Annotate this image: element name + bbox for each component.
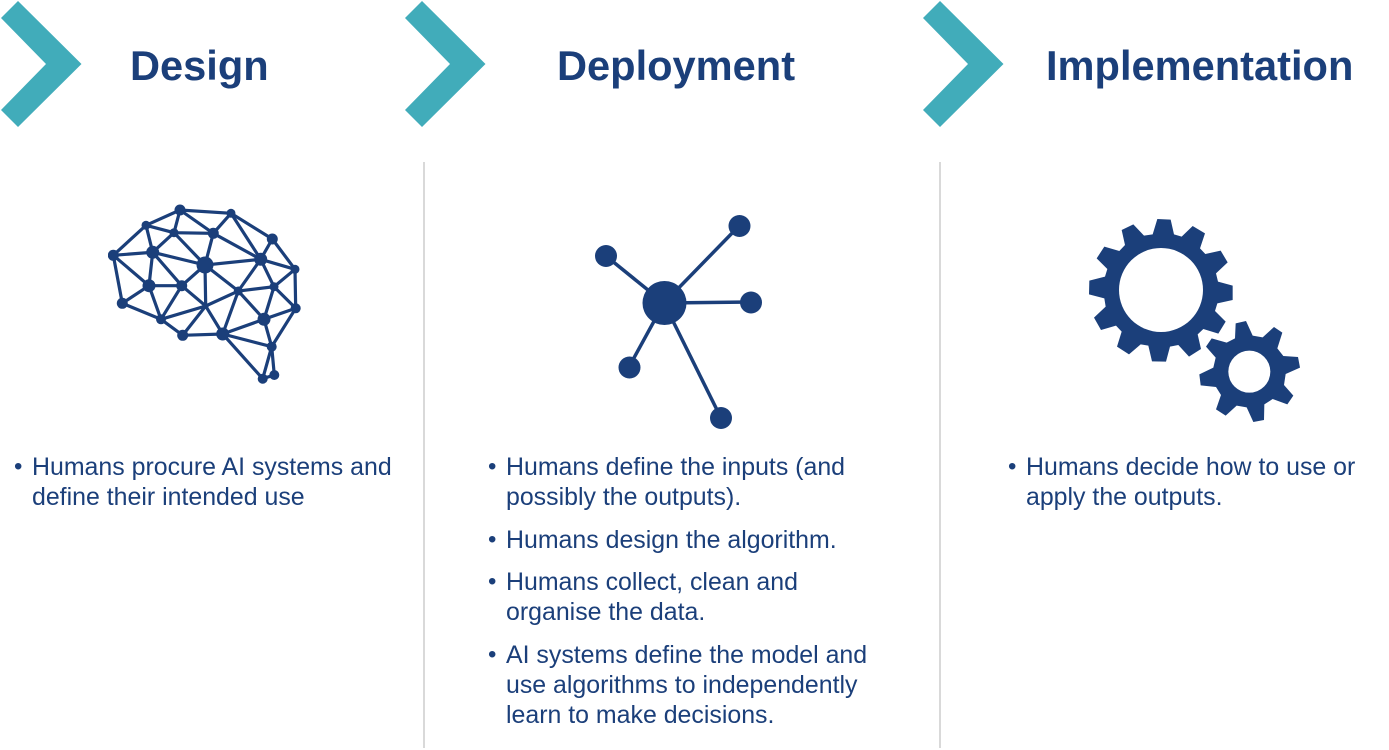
icon: neural brain (108, 204, 301, 384)
text block: implementation bullets (1008, 453, 1355, 511)
icon: chevron design (1, 1, 82, 127)
text block: deployment bullets: • (488, 641, 496, 668)
text block: implementation bullets: apply the outputs. (1026, 483, 1222, 511)
text block: deployment bullets: • (488, 568, 496, 595)
text block: design bullets: Humans procure AI systems and (32, 453, 392, 481)
icon: network hub (595, 215, 762, 429)
text block: design bullets: define their intended use (32, 483, 305, 511)
text block: deployment bullets: use algorithms to independently (506, 671, 857, 699)
text block: deployment bullets: Humans define the inputs (and (506, 453, 845, 481)
text block: deployment bullets: AI systems define the model and (506, 641, 867, 669)
text block: deployment bullets: Humans design the algorithm. (506, 526, 837, 554)
text block: deployment bullets: • (488, 453, 496, 480)
text block: deployment bullets: • (488, 526, 496, 553)
heading: Design: Design (130, 42, 269, 88)
heading: Implementation: Implementation (1046, 42, 1353, 88)
text block: implementation bullets: • (1008, 453, 1016, 480)
icon: gears (1089, 219, 1300, 422)
text block: deployment bullets: learn to make decisions. (506, 701, 774, 729)
text block: deployment bullets (488, 453, 867, 729)
text block: design bullets: • (14, 453, 22, 480)
icon: chevron deployment (405, 1, 486, 127)
text block: deployment bullets: possibly the outputs). (506, 483, 741, 511)
text block: deployment bullets: Humans collect, clean and (506, 568, 798, 596)
text block: implementation bullets: Humans decide how to use or (1026, 453, 1355, 481)
icon: chevron implementation (923, 1, 1004, 127)
text block: deployment bullets: organise the data. (506, 598, 705, 626)
heading: Deployment: Deployment (557, 42, 795, 88)
text block: design bullets (14, 453, 392, 511)
